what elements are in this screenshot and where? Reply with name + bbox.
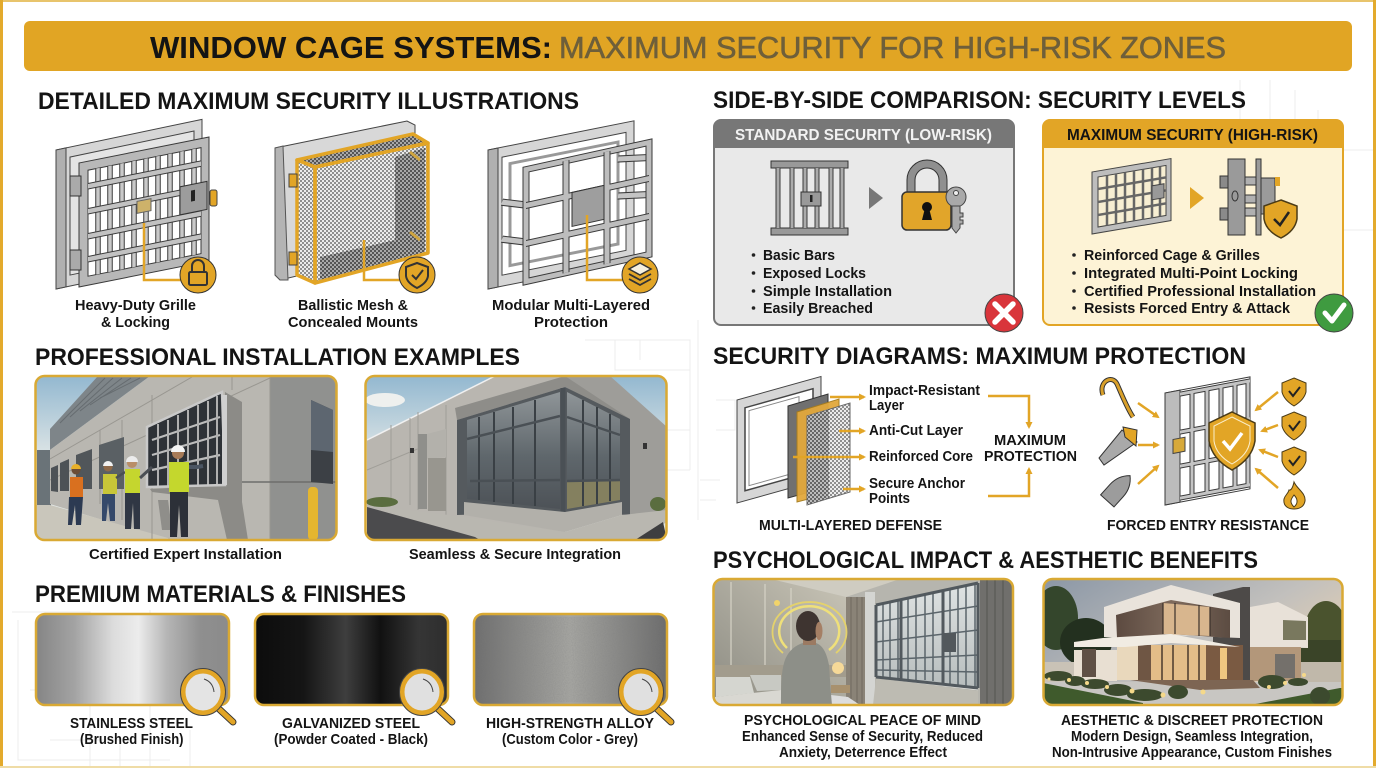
icon: green check xyxy=(1315,294,1353,332)
caption xyxy=(288,297,418,331)
caption: peace of mind: Anxiety, Deterrence Effect xyxy=(779,744,947,761)
panel: side-by-side comparison xyxy=(713,87,1353,332)
icon: layers badge xyxy=(622,257,658,293)
label: (Brushed Finish) xyxy=(80,731,184,748)
label: STAINLESS STEEL xyxy=(70,715,193,732)
photo: modern house xyxy=(1034,579,1348,705)
card: standard security xyxy=(714,120,1023,332)
heading: SIDE-BY-SIDE COMPARISON: SECURITY LEVELS xyxy=(713,87,1246,114)
label: HIGH-STRENGTH ALLOY xyxy=(486,715,654,732)
icon: big shield xyxy=(1209,412,1255,470)
list: Reinforced Cage & Grilles xyxy=(1084,247,1260,264)
label: GALVANIZED STEEL xyxy=(282,715,420,732)
bracket arrows xyxy=(988,396,1029,496)
photo: man in bedroom xyxy=(713,579,1013,705)
icon: multi-point lock with shield xyxy=(1220,159,1297,238)
caption xyxy=(492,297,650,331)
caption: aesthetic protection xyxy=(1052,712,1332,761)
icon: padlock and key xyxy=(902,164,966,233)
panel: detailed illustrations xyxy=(38,88,658,331)
list: Integrated Multi-Point Locking xyxy=(1084,265,1298,282)
icon: reinforced cage xyxy=(1092,159,1171,234)
title banner xyxy=(24,21,1352,71)
photo: building integration xyxy=(365,376,667,540)
diagram: multi-layered defense xyxy=(737,376,1077,534)
illustration: heavy-duty grille xyxy=(56,119,217,331)
caption: Protection xyxy=(534,314,608,331)
icon: crowbar xyxy=(1102,380,1133,417)
workers xyxy=(68,445,203,537)
caption xyxy=(75,297,196,331)
illustration: modular layered xyxy=(488,117,658,331)
maximum protection label xyxy=(984,433,1077,465)
panel: professional installation xyxy=(35,344,667,563)
icon: flame xyxy=(1284,482,1305,509)
icon: bullet xyxy=(1101,470,1137,507)
panel: security diagrams xyxy=(713,343,1309,534)
layer labels xyxy=(869,383,980,507)
arrow xyxy=(1190,187,1204,209)
icon: magnifier xyxy=(400,668,452,722)
caption: aesthetic protection: Non-Intrusive Appearance, Custom Finishes xyxy=(1052,744,1332,761)
gate xyxy=(1165,377,1250,505)
icon: shield badge xyxy=(399,257,435,293)
layer labels: Impact-Resistant xyxy=(869,383,980,399)
heading: PREMIUM MATERIALS & FINISHES xyxy=(35,581,406,608)
icon: magnifier xyxy=(180,668,233,722)
list: Certified Professional Installation xyxy=(1084,283,1316,300)
caption: FORCED ENTRY RESISTANCE xyxy=(1107,517,1309,534)
card: maximum security: MAXIMUM SECURITY (HIGH-RISK) xyxy=(1067,127,1318,144)
label xyxy=(486,715,654,748)
list xyxy=(752,247,892,317)
icon: basic bars xyxy=(771,161,848,235)
maximum protection label: MAXIMUM xyxy=(994,433,1066,449)
icon: small shields xyxy=(1282,378,1306,475)
swatch: stainless steel xyxy=(36,614,233,748)
caption: aesthetic protection: AESTHETIC & DISCREET PROTECTION xyxy=(1061,712,1323,729)
heading: DETAILED MAXIMUM SECURITY ILLUSTRATIONS xyxy=(38,88,579,115)
layer labels: Secure Anchor xyxy=(869,476,965,492)
panel: psychological impact and aesthetics xyxy=(713,547,1348,761)
swatch: high-strength alloy xyxy=(474,614,671,748)
attack arrows xyxy=(1138,392,1278,488)
caption: Modular Multi-Layered xyxy=(492,297,650,314)
arrow xyxy=(869,187,883,209)
caption: Heavy-Duty Grille xyxy=(75,297,196,314)
panel: materials and finishes xyxy=(35,581,671,748)
icon: magnifier xyxy=(618,668,671,722)
list: Resists Forced Entry & Attack xyxy=(1084,300,1291,317)
list: Exposed Locks xyxy=(763,265,866,282)
list: Basic Bars xyxy=(763,247,835,264)
caption: Seamless & Secure Integration xyxy=(409,546,621,563)
layer labels: Anti-Cut Layer xyxy=(869,423,963,439)
caption: Concealed Mounts xyxy=(288,314,418,331)
heading: SECURITY DIAGRAMS: MAXIMUM PROTECTION xyxy=(713,343,1246,370)
caption: Ballistic Mesh & xyxy=(298,297,408,314)
window frame xyxy=(737,376,821,503)
icon: saw xyxy=(1099,427,1137,465)
list: Easily Breached xyxy=(763,300,873,317)
caption: peace of mind: PSYCHOLOGICAL PEACE OF MIND xyxy=(744,712,981,729)
card: standard security: STANDARD SECURITY (LOW-RISK) xyxy=(735,127,992,144)
icon: padlock badge xyxy=(180,257,216,293)
layer labels: Reinforced Core xyxy=(869,449,973,465)
label xyxy=(70,715,193,748)
heading: PSYCHOLOGICAL IMPACT & AESTHETIC BENEFITS xyxy=(713,547,1258,574)
illustration: ballistic mesh xyxy=(275,121,435,331)
caption: aesthetic protection: Modern Design, Seamless Integration, xyxy=(1071,728,1313,745)
icon: red cross xyxy=(985,294,1023,332)
title text: dark part: WINDOW CAGE SYSTEMS: xyxy=(150,30,552,65)
layers xyxy=(788,394,828,498)
label: (Powder Coated - Black) xyxy=(274,731,428,748)
photo: workers installing grille xyxy=(35,376,337,540)
caption: peace of mind: Enhanced Sense of Security, Reduced xyxy=(742,728,983,745)
card: maximum security xyxy=(1043,120,1353,332)
title text: muted part: MAXIMUM SECURITY FOR HIGH-RISK ZONES xyxy=(559,30,1226,65)
layer labels: Points xyxy=(869,491,910,507)
caption: MULTI-LAYERED DEFENSE xyxy=(759,517,942,534)
caption: peace of mind xyxy=(742,712,983,761)
caption: Certified Expert Installation xyxy=(89,546,282,563)
layer labels: Layer xyxy=(869,398,904,414)
maximum protection label: PROTECTION xyxy=(984,449,1077,465)
diagram: forced entry resistance xyxy=(1099,377,1309,534)
label xyxy=(274,715,428,748)
arrows to labels xyxy=(793,397,864,489)
caption: & Locking xyxy=(101,314,170,331)
list: Simple Installation xyxy=(763,283,892,300)
glow rings xyxy=(773,602,846,653)
heading: PROFESSIONAL INSTALLATION EXAMPLES xyxy=(35,344,520,371)
label: (Custom Color - Grey) xyxy=(502,731,638,748)
swatch: galvanized steel xyxy=(255,614,452,748)
list xyxy=(1072,247,1316,317)
